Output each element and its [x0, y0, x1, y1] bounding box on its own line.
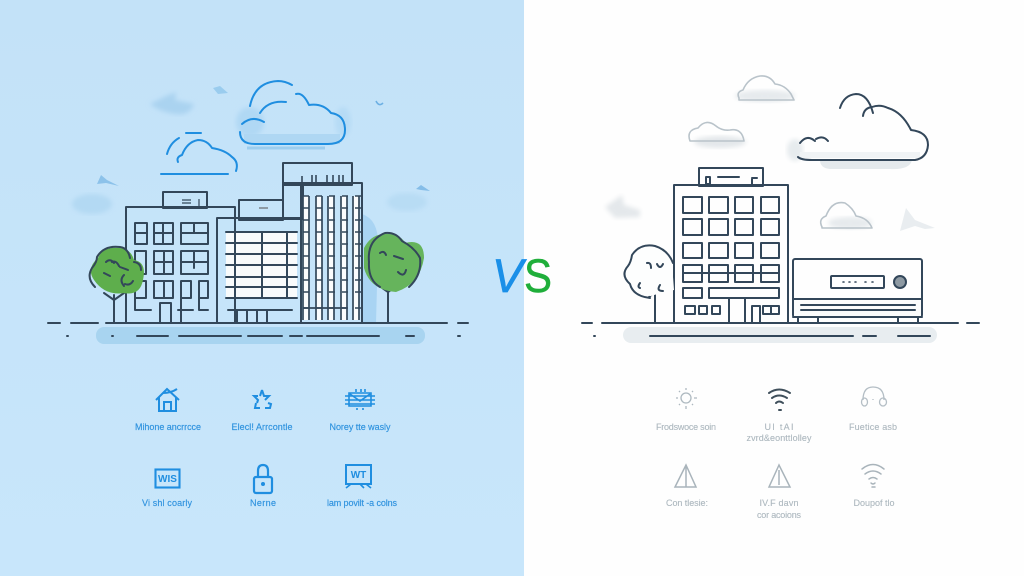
icon: chip [345, 389, 375, 410]
icon: warning 2 [769, 465, 790, 487]
label 5: IV.F davn [760, 498, 798, 508]
VS label [492, 249, 552, 302]
tree: left [90, 247, 144, 323]
icon: screen [346, 465, 371, 488]
label 3: Norey tte wasly [330, 422, 391, 432]
icon: warning 1 [675, 465, 696, 487]
building: tower [283, 163, 378, 323]
label 1: Mihone ancrrcce [135, 422, 201, 432]
left clouds [72, 81, 430, 214]
device: router [793, 259, 922, 323]
icon: sun [676, 388, 697, 409]
label 2 [746, 422, 812, 443]
tree: right panel [624, 245, 674, 323]
label 2: zvrd&eonttlolley [746, 433, 812, 443]
label 2: UI tAI [764, 422, 794, 432]
label 5 [757, 498, 802, 520]
icon: wifi light [862, 464, 884, 487]
right clouds [605, 76, 935, 231]
label 5: cor acoions [757, 510, 802, 520]
icon: star [254, 390, 271, 408]
icon: lock [254, 465, 272, 493]
label 3: Fuetice asb [849, 422, 897, 432]
label 2: Elecl! Arrcontle [232, 422, 292, 432]
label 5: Nerne [250, 498, 276, 508]
icon: headphones [862, 387, 886, 406]
building: office [674, 168, 788, 323]
label 4: Con tlesie: [666, 498, 708, 508]
building: middle block [217, 200, 301, 323]
VS label: S [524, 249, 552, 302]
icon: screen: WT [351, 470, 366, 481]
icon: wifi dark [769, 390, 790, 410]
panel: right [582, 76, 979, 520]
left ground [48, 323, 468, 344]
right features [656, 387, 897, 520]
label 6: Doupof tlo [854, 498, 894, 508]
label 6: lam povilt -a colns [327, 498, 398, 508]
panel: left [0, 0, 524, 576]
icon: home [156, 389, 179, 411]
label 1: Frodswoce soin [656, 422, 716, 432]
right ground [582, 323, 979, 343]
VS label: V [492, 249, 527, 302]
icon: WIS card [156, 470, 180, 488]
tree: right [364, 233, 424, 323]
label 4: Vi shl coarly [142, 498, 192, 508]
icon: WIS card: WIS [158, 474, 177, 485]
building: left wing [126, 192, 235, 323]
left features [135, 389, 398, 508]
